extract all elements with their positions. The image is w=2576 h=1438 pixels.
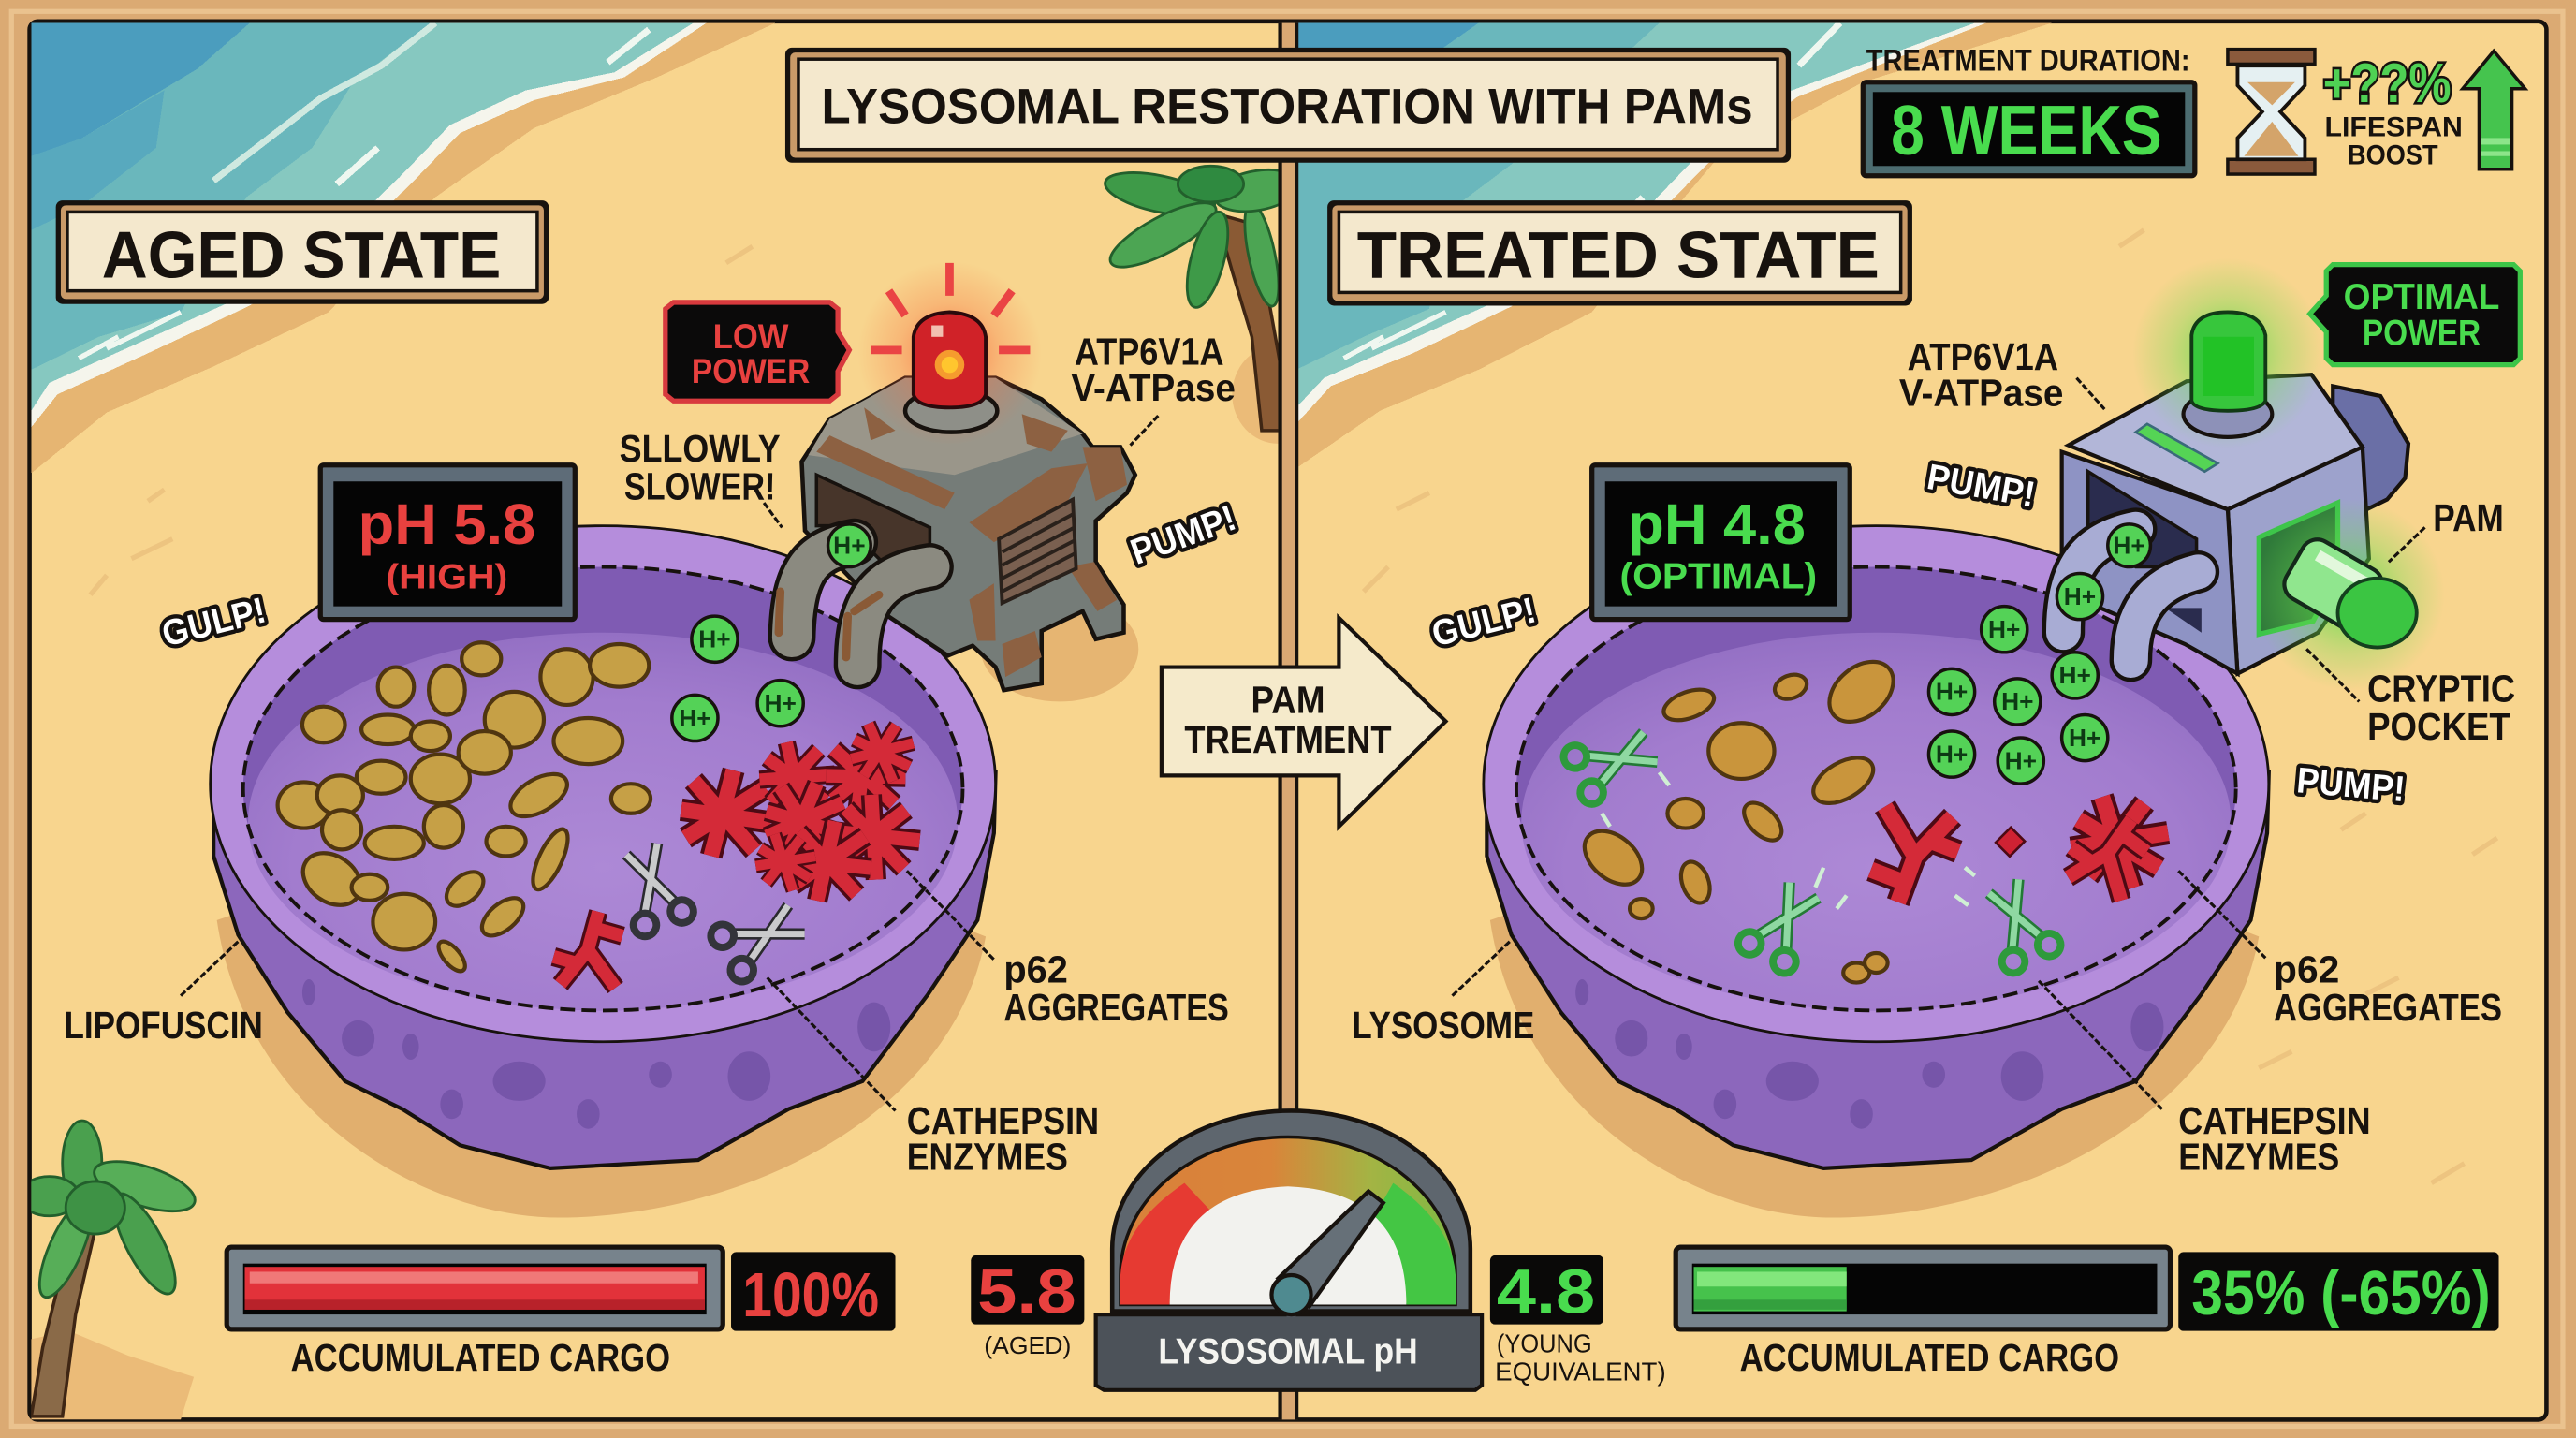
protons right: H+ — [1936, 740, 1968, 768]
lysosome craters — [1575, 979, 2163, 1129]
label: ATP6V1A left: V-ATPase — [1071, 366, 1236, 409]
value: aged pH: (AGED) — [984, 1331, 1071, 1359]
alarm light green — [2132, 258, 2323, 448]
protons left: H+ — [698, 625, 731, 653]
status slot — [2136, 424, 2217, 472]
label: cathepsin enzymes right: ENZYMES — [2178, 1136, 2339, 1179]
value: young pH: 4.8 — [1497, 1257, 1595, 1327]
pump left face — [2062, 452, 2237, 674]
pump right face — [2228, 447, 2369, 674]
protons left: H+ — [764, 689, 797, 717]
pop text: sllowly slower: SLOWER! — [624, 465, 775, 508]
lipofuscin cargo — [278, 642, 651, 976]
lysosome rim — [1484, 526, 2269, 1042]
label: cathepsin enzymes left: ENZYMES — [907, 1136, 1068, 1179]
protons right: H+ — [2001, 687, 2033, 715]
center divider — [1278, 23, 1298, 1419]
bar: treated accumulated cargo — [1676, 1247, 2499, 1379]
gauge arch — [1112, 1110, 1471, 1312]
protons right: H+ — [2059, 661, 2091, 689]
label: cathepsin enzymes right: CATHEPSIN — [2178, 1099, 2371, 1142]
label: cathepsin enzymes right — [2039, 981, 2371, 1179]
p62 aggregates cluster — [553, 711, 934, 988]
ATP6V1A pump optimized — [2062, 374, 2408, 674]
lysosome body — [1486, 772, 2269, 1168]
lifespan boost: LIFESPAN — [2324, 112, 2463, 143]
callout: pH 5.8 — [320, 465, 575, 620]
protons right: H+ — [2005, 746, 2037, 774]
icon: palm tree bottom — [20, 1121, 200, 1419]
bar: aged accumulated cargo: 100% — [742, 1261, 879, 1330]
label: ATP6V1A right: V-ATPase — [1899, 372, 2063, 415]
protons right: H+ — [2113, 531, 2145, 559]
pop text: sllowly slower: SLLOWLY — [620, 427, 781, 470]
protons right — [1928, 524, 2150, 784]
gauge: lysosomal pH: LYSOSOMAL pH — [1158, 1332, 1418, 1372]
label: cryptic pocket: POCKET — [2367, 705, 2510, 748]
label: cryptic pocket — [2306, 649, 2515, 748]
label: cathepsin enzymes left: CATHEPSIN — [907, 1099, 1099, 1142]
label: lipofuscin — [64, 942, 263, 1047]
heading: aged state: AGED STATE — [102, 218, 501, 292]
protons right: H+ — [1988, 615, 2020, 643]
lifespan boost: +??% — [2323, 51, 2452, 114]
alarm light red — [857, 261, 1042, 446]
pop text: pump left: PUMP! — [1125, 498, 1241, 573]
label: p62 aggregates left: p62 — [1003, 948, 1068, 991]
icon: hourglass — [2228, 50, 2315, 174]
label: lipofuscin: LIPOFUSCIN — [64, 1004, 263, 1047]
icon: palm tree top — [1104, 165, 1279, 444]
callout: low power: LOW — [713, 317, 789, 356]
heading: treated state: TREATED STATE — [1357, 218, 1880, 292]
rust patches — [816, 407, 1127, 677]
callout: low power — [666, 302, 849, 401]
gauge: lysosomal pH — [1096, 1110, 1482, 1390]
value: young pH: (YOUNG — [1497, 1328, 1592, 1357]
value: young pH: EQUIVALENT) — [1495, 1357, 1666, 1386]
callout: low power: POWER — [692, 352, 810, 390]
pop text: gulp left: GULP! — [158, 590, 270, 654]
label: ATP6V1A right: ATP6V1A — [1908, 335, 2058, 378]
lysosome rim — [211, 526, 996, 1042]
callout: pH 4.8: (OPTIMAL) — [1620, 556, 1817, 596]
pop text: pump top right: PUMP! — [1925, 457, 2038, 516]
label: cathepsin enzymes left — [768, 977, 1099, 1179]
arrow: PAM treatment — [1162, 618, 1445, 827]
gauge white face — [1170, 1186, 1406, 1305]
gauge base — [1096, 1299, 1482, 1390]
protons right: H+ — [2069, 724, 2100, 752]
value: aged pH: 5.8 — [977, 1257, 1076, 1327]
cryptic pocket and PAM capsule — [2254, 500, 2445, 690]
label: lysosome: LYSOSOME — [1352, 1004, 1534, 1047]
panel: aged lysosome — [211, 526, 996, 1218]
gauge red zone — [1120, 1183, 1211, 1305]
arrow: PAM treatment: TREATMENT — [1184, 718, 1392, 761]
callout: pH 4.8: pH 4.8 — [1628, 492, 1806, 557]
ATP6V1A pump rusty — [779, 378, 1138, 701]
lysosome craters — [302, 979, 890, 1129]
callout: optimal power: OPTIMAL — [2344, 277, 2499, 317]
protons left — [672, 616, 803, 741]
label: p62 aggregates right: p62 — [2274, 948, 2339, 991]
sand speckles — [91, 230, 2497, 1299]
pump opening — [816, 475, 929, 567]
value: aged pH — [971, 1255, 1084, 1359]
gauge needle — [1278, 1191, 1383, 1306]
pop text: pump bottom right: PUMP! — [2295, 760, 2407, 810]
protons left: H+ — [679, 704, 711, 732]
panel: aged state beach background — [31, 23, 775, 473]
bar: aged accumulated cargo — [227, 1247, 896, 1379]
bar: treated accumulated cargo: 35% (-65%) — [2191, 1259, 2491, 1328]
label: PAM — [2389, 496, 2504, 562]
inlet pipes — [779, 542, 929, 666]
reduced p62 aggregates — [1868, 777, 2185, 907]
pop text: sllowly slower — [620, 427, 782, 527]
protons right: H+ — [1936, 678, 1968, 706]
treatment duration value: 8 WEEKS — [1891, 91, 2162, 169]
lysosome body — [213, 772, 996, 1168]
label: lysosome — [1352, 942, 1534, 1047]
vent grille — [999, 500, 1076, 603]
lysosome ground shadow — [217, 788, 986, 1218]
panel: treated lysosome — [1484, 526, 2269, 1218]
label: ATP6V1A left: ATP6V1A — [1075, 330, 1224, 374]
label: ATP6V1A left — [1071, 330, 1236, 446]
title: LYSOSOMAL RESTORATION WITH PAMs — [822, 80, 1753, 135]
label: p62 aggregates right — [2178, 871, 2502, 1029]
label: PAM: PAM — [2433, 496, 2504, 539]
active cathepsin scissors — [1559, 716, 2065, 977]
callout: pH 4.8 — [1592, 465, 1850, 620]
cathepsin scissors inactive — [609, 840, 811, 986]
proton in pump left: H+ — [833, 531, 866, 559]
title — [785, 48, 1791, 163]
heading: treated state — [1327, 200, 1912, 305]
callout: optimal power: POWER — [2363, 314, 2481, 354]
callout: optimal power — [2310, 265, 2520, 365]
label: p62 aggregates left — [907, 871, 1229, 1029]
bar: treated accumulated cargo: ACCUMULATED CARGO — [1740, 1336, 2119, 1379]
arrow: PAM treatment: PAM — [1251, 679, 1325, 722]
protons right: H+ — [2064, 582, 2096, 610]
bar: aged accumulated cargo: ACCUMULATED CARGO — [291, 1336, 670, 1379]
callout: pH 5.8: (HIGH) — [386, 557, 507, 595]
heading: aged state — [56, 200, 549, 304]
value: young pH — [1490, 1255, 1666, 1386]
pump shadow — [981, 596, 1138, 701]
proton in pump left — [828, 524, 871, 567]
lysosome interior — [1516, 567, 2236, 1010]
panel: treated state beach background — [1296, 23, 2052, 468]
reduced lipofuscin cargo — [1574, 650, 1905, 983]
label: cryptic pocket: CRYPTIC — [2367, 667, 2515, 710]
lysosome ground shadow — [1490, 788, 2259, 1218]
pump silhouette — [801, 378, 1135, 690]
inlet pipes — [2063, 529, 2198, 661]
callout: pH 5.8: pH 5.8 — [359, 492, 535, 557]
icon: up arrow — [2463, 51, 2525, 169]
label: p62 aggregates right: AGGREGATES — [2274, 986, 2502, 1029]
label: p62 aggregates left: AGGREGATES — [1003, 986, 1229, 1029]
label: ATP6V1A right — [1899, 335, 2104, 415]
treatment duration label: TREATMENT DURATION: — [1866, 43, 2190, 77]
pump rear cylinder — [2333, 386, 2408, 526]
pop text: gulp right: GULP! — [1428, 590, 1540, 654]
pump top — [2069, 374, 2363, 509]
pump top face — [809, 378, 1083, 475]
lysosome interior — [243, 567, 962, 1010]
lifespan boost: BOOST — [2348, 140, 2438, 171]
lifespan boost — [2323, 51, 2463, 171]
gauge green zone — [1373, 1183, 1456, 1305]
